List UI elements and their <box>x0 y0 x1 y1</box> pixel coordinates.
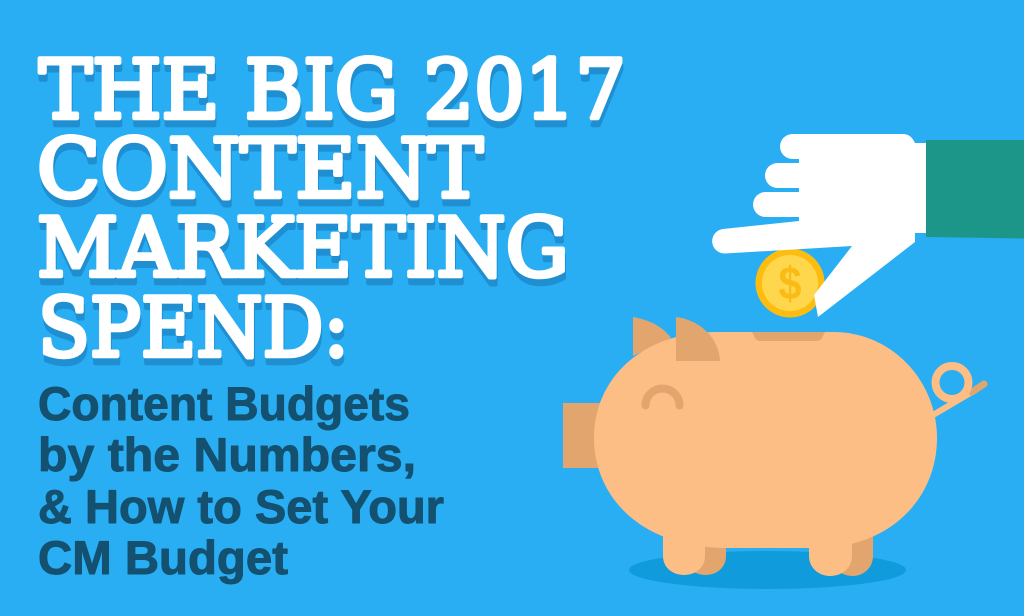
pig snout <box>563 403 603 468</box>
subtitle <box>38 377 444 584</box>
coin slot <box>752 332 825 341</box>
subtitle: by the Numbers, <box>38 428 416 481</box>
pig body <box>594 332 937 548</box>
title: MARKETING <box>37 202 569 296</box>
icon: hand <box>712 134 926 317</box>
icon: gold coin <box>756 248 824 318</box>
pig ground shadow <box>629 551 906 589</box>
subtitle: CM Budget <box>38 531 288 584</box>
title: CONTENT <box>37 123 483 217</box>
pig back legs <box>690 530 873 576</box>
title <box>37 44 626 376</box>
pig eye <box>646 388 680 406</box>
icon: sleeve <box>926 140 1024 238</box>
icon: gold coin: $ <box>778 257 802 309</box>
pig front ear <box>676 317 720 361</box>
title: THE BIG 2017 <box>39 44 626 138</box>
subtitle: Content Budgets <box>38 377 410 430</box>
pig tail <box>933 366 984 415</box>
pig back ear <box>633 317 671 356</box>
icon: piggy bank <box>563 317 984 589</box>
pig front legs <box>663 530 852 576</box>
subtitle: & How to Set Your <box>38 480 444 533</box>
title: SPEND: <box>38 282 349 376</box>
